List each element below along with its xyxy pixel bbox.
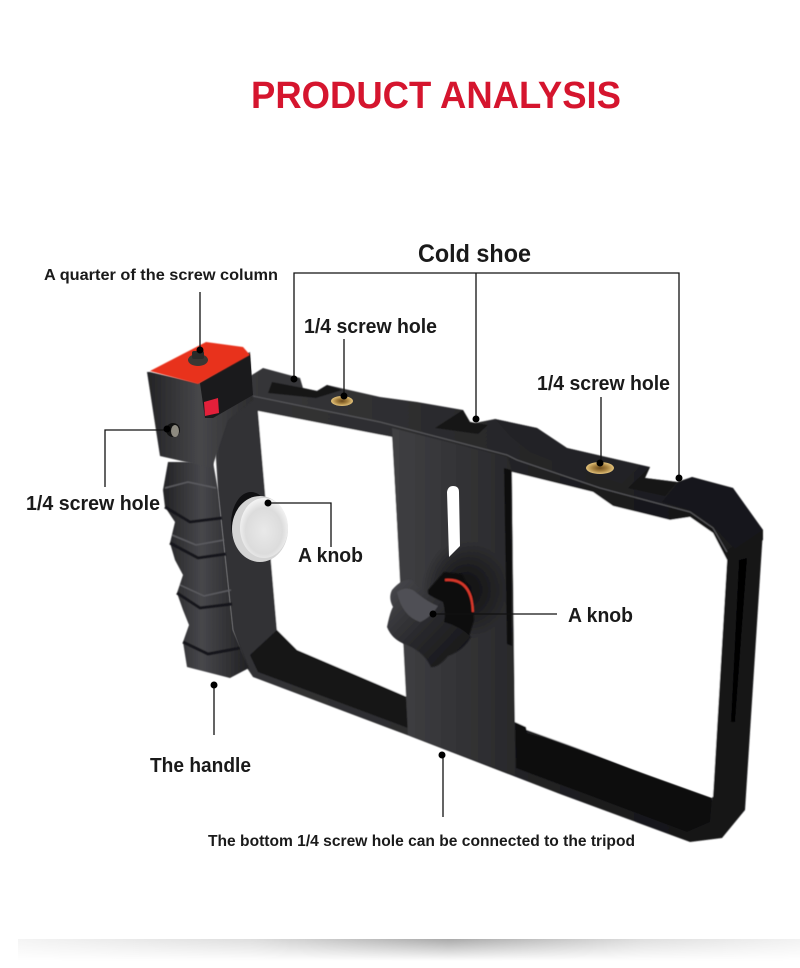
callout: handle xyxy=(150,682,251,777)
callout: cold shoe: Cold shoe xyxy=(418,240,531,268)
plate shadow behind knob xyxy=(421,540,509,640)
callout: right rail screw hole xyxy=(537,373,670,466)
right corner bevel xyxy=(662,477,763,549)
quarter screw stud xyxy=(188,351,208,366)
callout: white knob xyxy=(264,500,363,567)
handle grip xyxy=(163,462,249,678)
title: PRODUCT ANALYSIS xyxy=(251,75,621,117)
callout: white knob: A knob xyxy=(298,545,363,567)
top brass insert right xyxy=(586,462,614,474)
callout: bottom screw hole: The bottom 1/4 screw hole can be connected to the tripod xyxy=(208,833,635,850)
callout: top screw column: A quarter of the screw column xyxy=(44,267,278,284)
lower inner surface left xyxy=(250,630,408,728)
callout: cold shoe xyxy=(290,240,682,482)
top brass insert left xyxy=(331,396,353,406)
callout: right rail screw hole: 1/4 screw hole xyxy=(537,373,670,395)
rail highlight xyxy=(228,391,727,552)
cold shoe steps xyxy=(268,382,677,496)
center plate xyxy=(392,428,515,775)
knob white xyxy=(231,492,288,562)
callout: handle side screw hole: 1/4 screw hole xyxy=(26,493,160,515)
product photo: phone rig xyxy=(147,342,763,842)
callout: left rail screw hole: 1/4 screw hole xyxy=(304,316,437,338)
bottom shadow band xyxy=(18,939,800,961)
side screw hole xyxy=(166,423,180,437)
top rail surface xyxy=(222,368,763,560)
knob black xyxy=(387,572,474,667)
right side slot xyxy=(731,558,747,722)
lower inner surface right xyxy=(515,722,712,832)
frame front face xyxy=(213,390,763,842)
callout: top screw column xyxy=(44,267,278,354)
red lock tab xyxy=(204,398,219,416)
callout: handle: The handle xyxy=(150,755,251,777)
red top plate xyxy=(150,342,250,384)
callout: bottom screw hole xyxy=(208,752,635,850)
slider slot xyxy=(447,486,460,557)
left window cut xyxy=(258,411,407,697)
right window cut xyxy=(512,472,727,797)
callout: left rail screw hole xyxy=(304,316,437,400)
callout: handle side screw hole xyxy=(26,426,170,515)
frame body xyxy=(213,368,763,842)
callout: black knob xyxy=(430,605,633,627)
handle head block xyxy=(147,352,253,468)
callout: black knob: A knob xyxy=(568,605,633,627)
